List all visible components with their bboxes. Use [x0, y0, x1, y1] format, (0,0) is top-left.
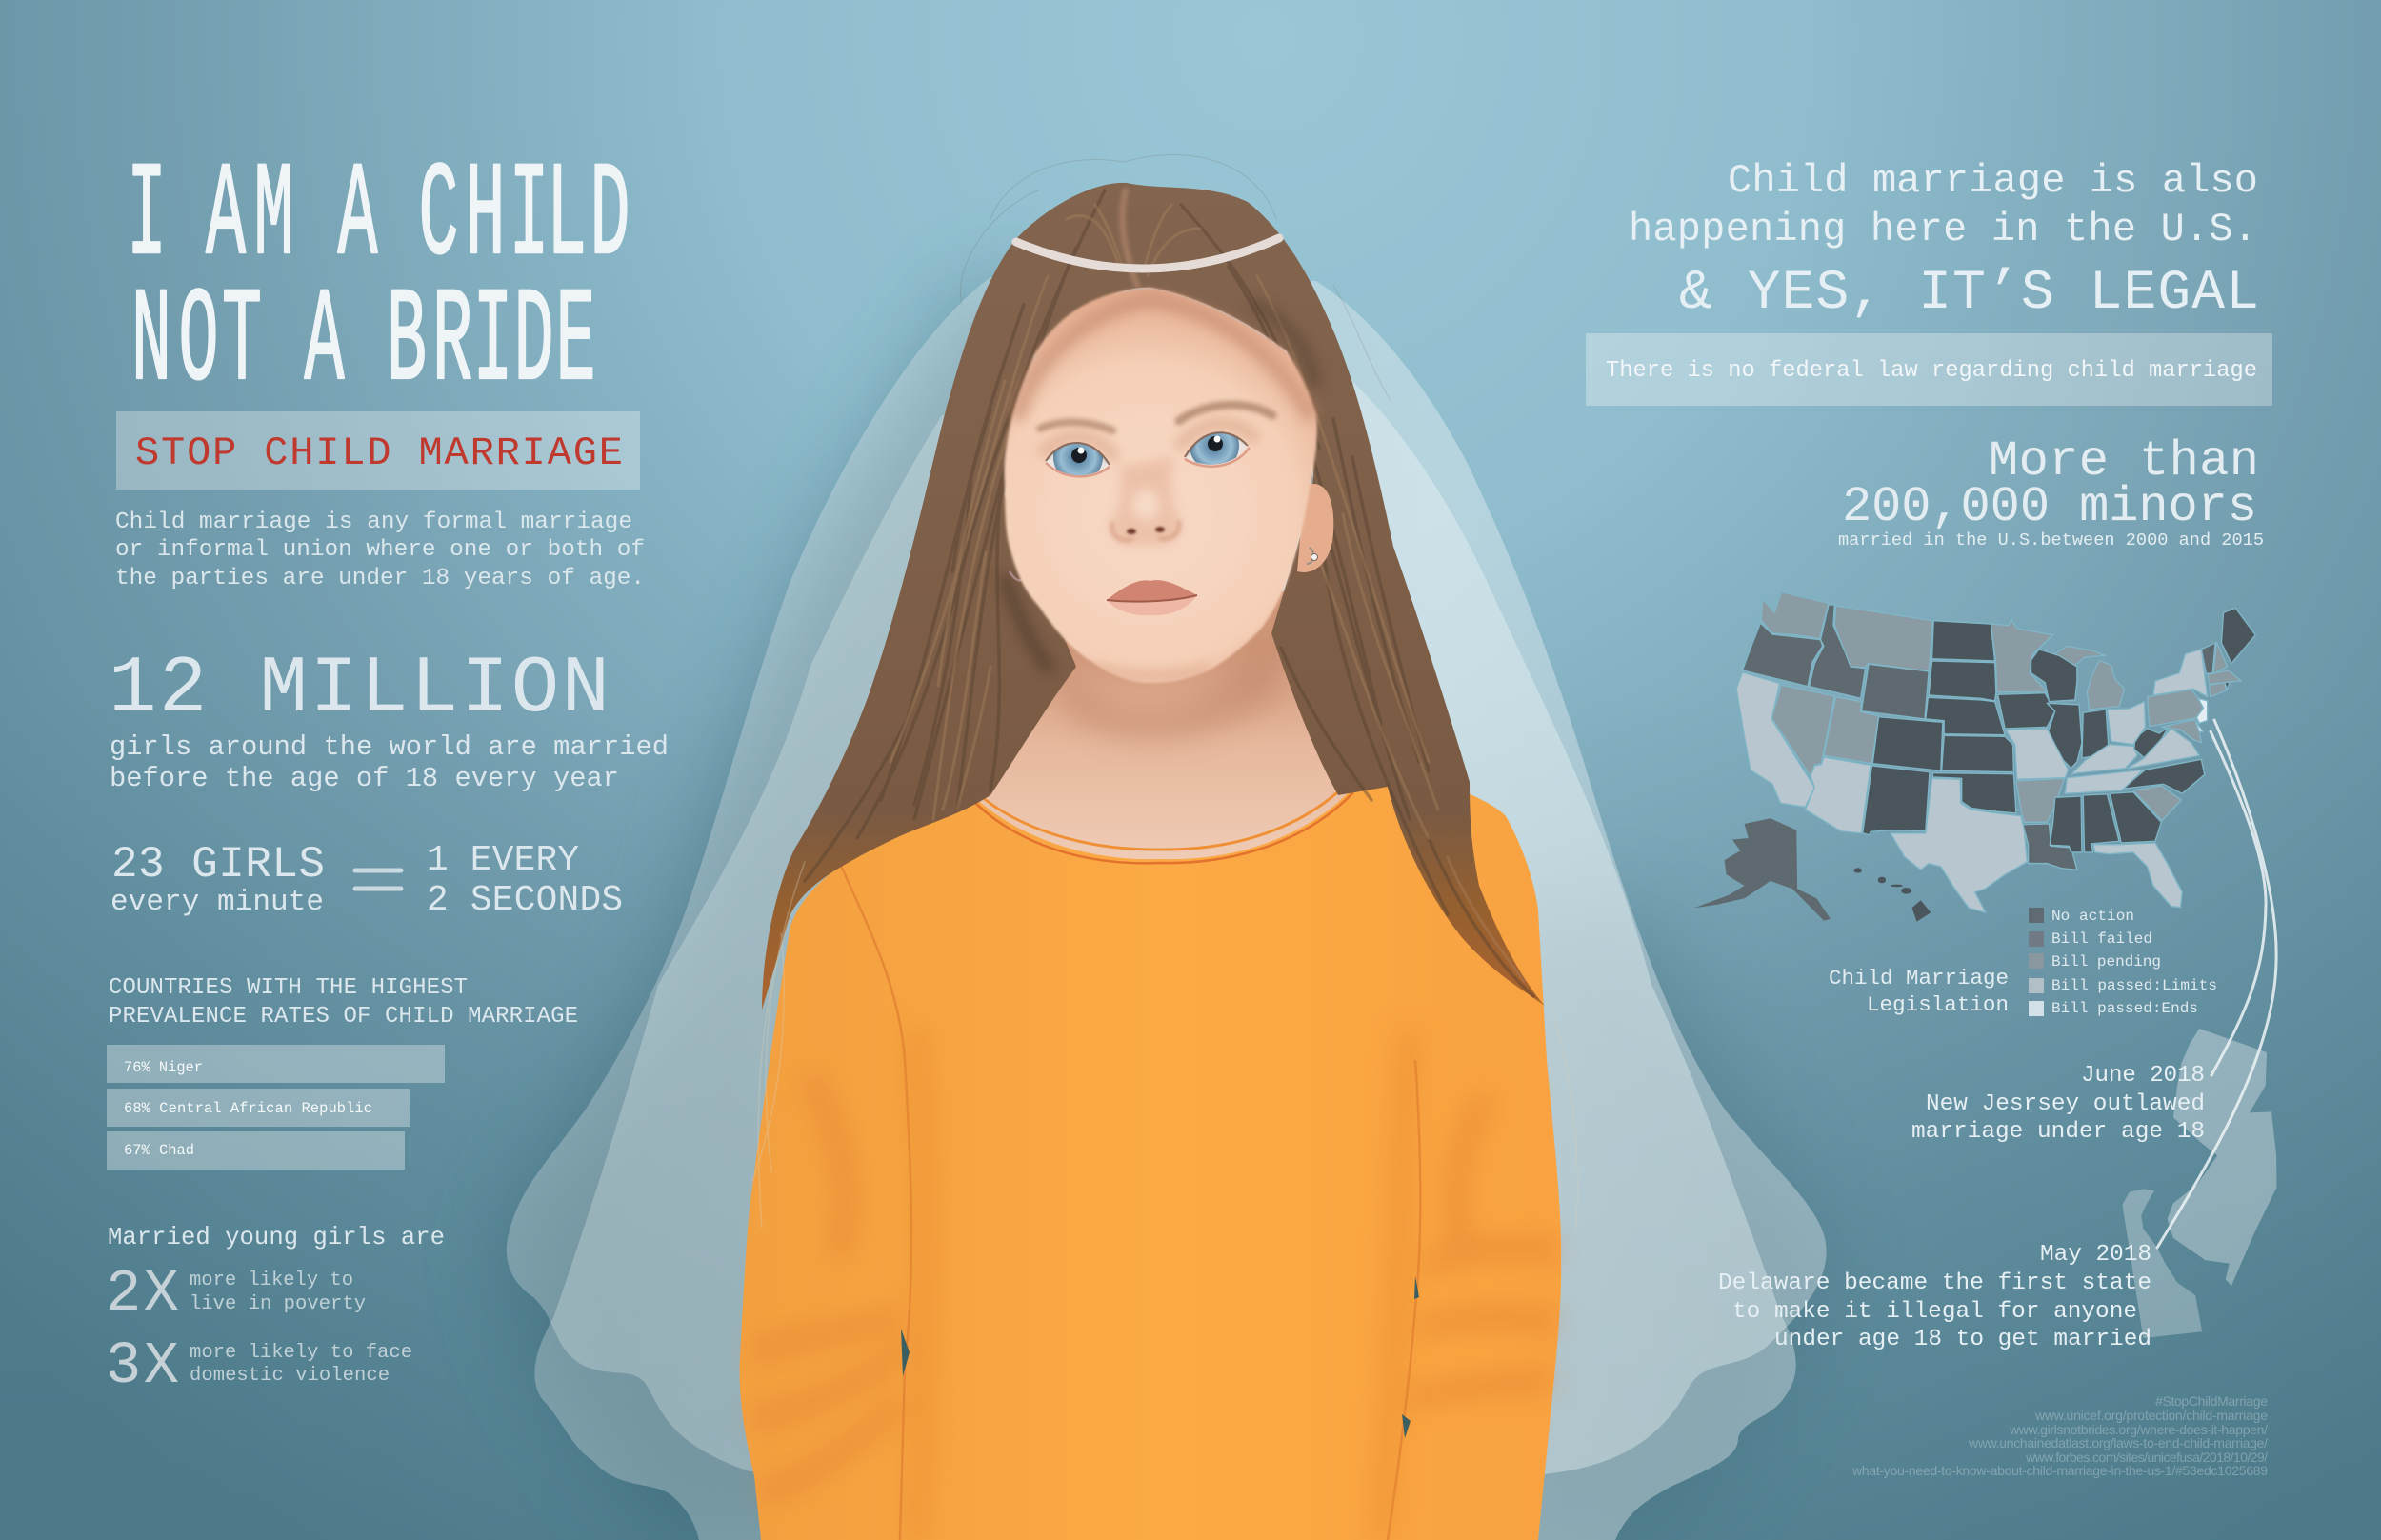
right column	[1586, 158, 2277, 1478]
map legend title	[1829, 966, 2009, 1017]
map legend	[2029, 908, 2217, 1017]
New Jersey state shape	[2168, 1029, 2277, 1286]
stop child marriage banner	[116, 411, 640, 490]
bar chart: prevalence rates: 76% Niger	[124, 1059, 203, 1076]
heading: also happening in the U.S.	[1629, 158, 2259, 325]
forehead hair shadow	[1017, 300, 1312, 419]
neck shadow	[1057, 629, 1281, 741]
Delaware callout	[1718, 1242, 2151, 1352]
neck	[962, 590, 1362, 914]
no federal law banner	[1586, 333, 2272, 406]
definition text: Child marriage is any formal marriage	[115, 510, 632, 535]
fly-away strands over the veil	[752, 862, 1577, 1229]
cheek and chin shading	[1095, 667, 1210, 675]
married young girls stats: live in poverty	[190, 1293, 366, 1315]
no federal law banner: There is no federal law regarding child marriage	[1606, 358, 2257, 384]
heading: also happening in the U.S.: & YES, IT’S LEGAL	[1679, 263, 2259, 325]
gaps between arms and torso	[901, 1276, 1419, 1438]
sources: www.unchainedatlast.org/laws-to-end-child-marriage/	[1968, 1435, 2268, 1450]
title: I AM A CHILD	[127, 143, 630, 293]
sources: www.forbes.com/sites/unicefusa/2018/10/29/	[2025, 1450, 2268, 1465]
New Jersey callout: June 2018	[2081, 1063, 2205, 1089]
sources: #StopChildMarriage	[2155, 1393, 2268, 1409]
married young girls stats: 3X	[106, 1332, 179, 1400]
200,000 minors stat	[1838, 433, 2264, 550]
sources: www.unicef.org/protection/child-marriage	[2034, 1408, 2268, 1423]
shirt collar	[970, 792, 1353, 863]
title	[127, 143, 630, 419]
23 girls equals 1 every 2 seconds: 1 EVERY	[427, 841, 579, 881]
map states: grey	[1761, 592, 2241, 822]
US legislation map	[1694, 592, 2255, 922]
married young girls stats	[106, 1224, 445, 1400]
12 million stat	[109, 645, 669, 794]
arrows from map to state callouts	[2157, 720, 2276, 1248]
eyebrows	[1040, 405, 1272, 430]
bar chart: prevalence rates	[107, 1045, 445, 1170]
girl portrait	[740, 154, 1577, 1540]
married young girls stats: 2X	[106, 1260, 179, 1328]
shirt sleeve seams and fold shading	[752, 866, 1557, 1540]
heading: also happening in the U.S.: happening here in the U.S.	[1629, 207, 2257, 252]
sources	[1851, 1393, 2268, 1478]
200,000 minors stat: More than	[1989, 433, 2259, 490]
map legend title: Legislation	[1867, 992, 2009, 1017]
countries heading: PREVALENCE RATES OF CHILD MARRIAGE	[109, 1004, 578, 1030]
map states: medium	[1694, 605, 2215, 921]
left eye	[1045, 442, 1110, 478]
New Jersey callout: New Jesrsey outlawed	[1926, 1091, 2205, 1117]
nose	[1110, 457, 1181, 546]
hair strands and shading	[752, 154, 1577, 1229]
Delaware callout: Delaware became the first state	[1718, 1270, 2151, 1296]
right eye	[1184, 431, 1251, 468]
veil headband	[1016, 238, 1279, 269]
map legend: Bill failed	[2051, 930, 2152, 948]
countries heading	[109, 975, 578, 1030]
earrings	[1010, 548, 1318, 580]
title: NOT A BRIDE	[131, 269, 595, 419]
equals sign	[355, 870, 401, 889]
long hair	[762, 183, 1545, 1010]
sources: www.girlsnotbrides.org/where-does-it-happen/	[2009, 1422, 2268, 1437]
200,000 minors stat: married in the U.S.between 2000 and 2015	[1838, 530, 2264, 550]
orange shirt	[740, 771, 1561, 1540]
12 million stat: girls around the world are married	[110, 731, 669, 763]
12 million stat: 12 MILLION	[109, 645, 610, 735]
bar chart: prevalence rates: 68% Central African Republic	[124, 1100, 372, 1117]
map states: dark	[1853, 608, 2255, 922]
23 girls equals 1 every 2 seconds: 23 GIRLS	[111, 840, 325, 890]
New Jersey callout: marriage under age 18	[1911, 1119, 2205, 1145]
23 girls equals 1 every 2 seconds: 2 SECONDS	[427, 881, 623, 921]
dark hair behind the jaw	[1006, 581, 1048, 667]
married young girls stats: domestic violence	[190, 1365, 390, 1387]
bridal veil	[507, 277, 1827, 1540]
map states: light	[1736, 650, 2208, 912]
map legend: Bill passed:Limits	[2051, 977, 2217, 994]
sources: what-you-need-to-know-about-child-marriage-in-the-us-1/#53edc1025689	[1851, 1463, 2268, 1478]
married young girls stats: more likely to face	[190, 1342, 412, 1364]
map legend: No action	[2051, 908, 2134, 925]
hair part line	[1122, 190, 1137, 286]
23 girls equals 1 every 2 seconds: every minute	[110, 886, 324, 919]
23 girls equals 1 every 2 seconds	[110, 840, 623, 921]
map legend title: Child Marriage	[1829, 966, 2009, 990]
married young girls stats: more likely to	[190, 1270, 353, 1291]
map legend: Bill pending	[2051, 953, 2161, 970]
Delaware callout: May 2018	[2040, 1242, 2151, 1268]
bar chart: prevalence rates: 67% Chad	[124, 1142, 194, 1159]
200,000 minors stat: 200,000 minors	[1842, 479, 2257, 535]
mouth	[1107, 580, 1197, 615]
married young girls stats: Married young girls are	[108, 1224, 445, 1251]
Delaware callout: under age 18 to get married	[1774, 1327, 2151, 1352]
veil: inner layer	[534, 383, 1796, 1540]
heading: also happening in the U.S.: Child marriage is also	[1728, 158, 2258, 204]
definition text	[115, 510, 645, 591]
face	[1005, 288, 1317, 683]
definition text: or informal union where one or both of	[115, 537, 645, 563]
Delaware callout: to make it illegal for anyone	[1732, 1299, 2137, 1325]
ear	[1297, 484, 1333, 572]
map states: ended child marriage	[2195, 698, 2208, 731]
eye sockets shadow	[1040, 424, 1257, 459]
Delaware state shape	[2122, 1189, 2202, 1338]
left column	[106, 143, 669, 1400]
stop child marriage banner: STOP CHILD MARRIAGE	[135, 430, 623, 476]
12 million stat: before the age of 18 every year	[110, 763, 619, 794]
definition text: the parties are under 18 years of age.	[115, 566, 645, 591]
countries heading: COUNTRIES WITH THE HIGHEST	[109, 975, 468, 1001]
veil: outer layer	[507, 277, 1827, 1474]
map legend: Bill passed:Ends	[2051, 1000, 2198, 1017]
New Jersey callout	[1911, 1063, 2205, 1145]
